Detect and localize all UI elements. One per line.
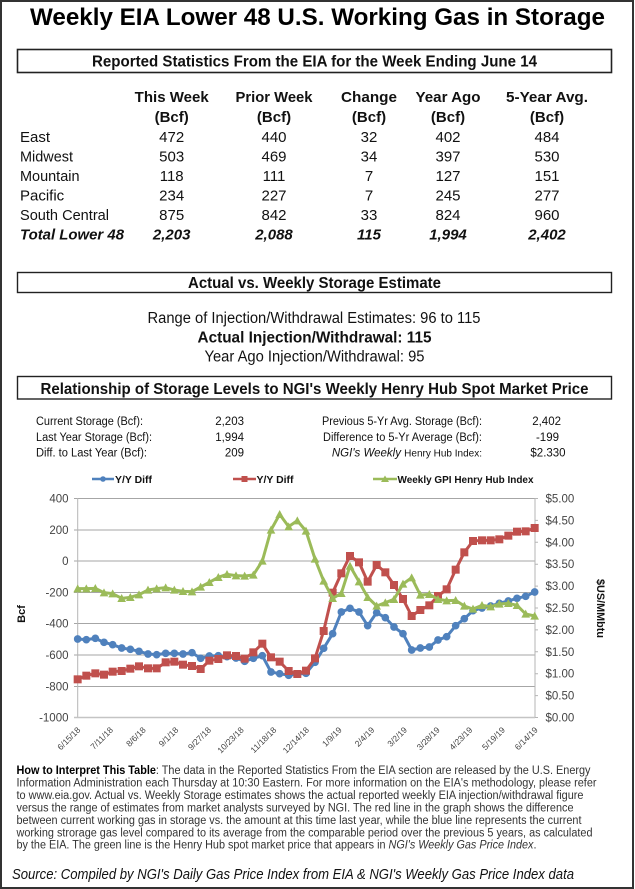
left axis labels [39,494,68,724]
x axis date labels: 3/2/19 [385,725,409,749]
panel: storage summary stats: 2,402 [532,416,561,428]
table row: East: 402 [435,129,461,146]
table column headers: Prior Week [236,89,313,106]
legend: blue series [92,474,152,486]
table row: Mountain: 111 [263,168,285,185]
table row: Total Lower 48: Total Lower 48 [20,226,125,244]
right axis labels: $0.50 [546,691,574,703]
table row: East: 484 [534,129,560,146]
table column headers: (Bcf) [352,109,386,126]
left axis labels: -200 [45,588,68,600]
x axis date labels: 11/18/18 [248,725,279,755]
table row: East: 472 [159,129,184,146]
legend: green series: Weekly GPI Henry Hub Index [398,474,534,486]
table row: Midwest [20,148,560,166]
series: red Y/Y diff [78,528,535,679]
chart legend [92,474,534,486]
table row: Mountain: 127 [435,168,461,185]
table row: East [20,129,560,146]
x axis date labels: 4/23/19 [447,725,475,752]
x axis date labels: 7/11/18 [88,725,115,752]
panel: storage statistics table [20,89,588,244]
table row: Pacific: 7 [365,188,373,204]
table row: Mountain: Mountain [20,168,80,185]
left axis labels: -800 [45,682,68,694]
left axis labels: -600 [45,650,68,662]
table row: Midwest: 397 [435,148,461,166]
right axis labels: $3.00 [546,581,574,593]
table row: South Central: 960 [534,207,560,224]
panel: storage summary stats: Previous 5-Yr Avg. Storage (Bcf): [322,416,482,428]
legend: red series [233,474,294,486]
x axis date labels: 6/15/18 [55,725,83,752]
table row: Midwest: Midwest [20,148,74,166]
right axis labels: $5.00 [546,494,574,506]
right axis labels: $0.00 [546,712,574,724]
table row: Midwest: 503 [159,148,184,166]
panel: storage summary stats [36,416,566,460]
table column headers: (Bcf) [155,109,189,126]
panel: reported statistics heading: Reported Statistics From the EIA for the Week Ending June 14 [92,54,537,70]
panel: relationship heading: Relationship of Storage Levels to NGI's Weekly Henry Hub Spot Market Price [40,381,589,398]
right axis labels: $3.50 [546,559,574,571]
table column headers [135,89,588,126]
panel: storage summary stats: -199 [536,432,559,444]
table row: East: 32 [361,129,377,146]
table row: Pacific: 277 [534,188,560,204]
table row: Total Lower 48 [20,226,566,244]
panel: storage summary stats: Difference to 5-Yr Average (Bcf): [323,432,482,444]
right axis title: $US/MMbtu [594,579,606,638]
x axis date labels: 12/14/18 [281,725,311,755]
text block: estimate summary: Range of Injection/Withdrawal Estimates: 96 to 115 [148,310,480,327]
table row: Mountain: 7 [365,168,373,185]
x axis date labels: 6/14/19 [513,725,540,752]
x axis date labels: 8/6/18 [124,725,148,749]
left axis labels: 0 [62,556,68,568]
table row: Total Lower 48: 115 [357,226,382,244]
left axis labels: -400 [45,618,68,630]
panel: storage summary stats: NGI's Weekly Henry Hub Index: [332,448,482,460]
title: Weekly EIA Lower 48 U.S. Working Gas in Storage [30,4,605,31]
table row: Pacific: Pacific [20,188,65,204]
table row: Pacific: 234 [159,188,184,204]
x axis date labels: 9/27/18 [186,725,213,752]
text block: how to interpret: versus the range of estimates from market analysts surveyed by NGI. The red line in the graph shows the difference [16,803,574,815]
table column headers: (Bcf) [257,109,291,126]
x axis date labels: 3/28/19 [415,725,442,752]
panel: storage summary stats: Current Storage (Bcf): [36,416,143,428]
left axis labels: 400 [49,494,68,506]
table column headers: 5-Year Avg. [506,89,588,106]
right axis labels: $2.50 [546,603,574,615]
text block: how to interpret: between current working gas in storage vs. the amount at this time last year, while the blue line represents the current [16,815,582,827]
panel: actual vs estimate heading [18,272,612,292]
panel: actual vs estimate heading: Actual vs. Weekly Storage Estimate [188,275,441,292]
panel: storage summary stats: $2.330 [530,448,566,460]
table column headers: (Bcf) [530,109,564,126]
x axis date labels [55,725,540,755]
text block: how to interpret: working strorage gas level compared to its average from the comparable period over the previous 5 years, as calculated [16,827,592,839]
panel: storage summary stats: Last Year Storage (Bcf): [36,432,152,444]
table row: South Central: South Central [20,207,109,224]
x axis date labels: 5/19/19 [480,725,507,752]
x axis date labels: 1/9/19 [320,725,344,749]
text block: how to interpret [16,765,597,852]
table row: South Central: 842 [261,207,287,224]
text block: estimate summary: Year Ago Injection/Withdrawal: 95 [204,348,424,366]
x axis date labels: 9/1/18 [157,725,181,749]
chart gridlines and axes [74,498,538,718]
text block: estimate summary [148,310,480,366]
table column headers: (Bcf) [431,109,465,126]
table row: Midwest: 530 [534,148,560,166]
table row: Midwest: 34 [361,148,377,166]
table row: East: 440 [261,129,287,146]
table row: Mountain [20,168,560,185]
table column headers: This Week [135,89,209,106]
table row: East: East [20,129,51,146]
right axis labels: $1.50 [546,647,574,659]
table row: South Central: 33 [361,207,377,224]
table row: Mountain: 118 [160,168,184,185]
right axis labels: $2.00 [546,625,574,637]
legend: red series: Y/Y Diff [256,474,294,486]
panel: storage summary stats: 209 [225,448,244,460]
table row: Midwest: 469 [261,148,287,166]
legend: blue series: Y/Y Diff [115,474,152,486]
table row: Total Lower 48: 2,088 [254,226,293,244]
table row: South Central [20,207,560,224]
text block: how to interpret: Information Administration each Thursday at 10:30 Eastern. For more information on the EIA's methodology, please refer [16,778,597,790]
table column headers: Change [341,89,397,106]
line chart [16,494,606,755]
table row: Pacific: 227 [261,188,287,204]
right axis labels: $1.00 [546,669,574,681]
text block: estimate summary: Actual Injection/Withdrawal: 115 [198,330,432,346]
left axis labels: 200 [49,525,68,537]
panel: reported statistics heading [18,50,612,72]
chart series lines [78,514,535,679]
table column headers: Year Ago [416,89,480,106]
right axis labels: $4.00 [546,537,574,549]
series: blue Y/Y diff [78,592,535,675]
right axis labels: $4.50 [546,515,574,527]
panel: storage summary stats: 2,203 [215,416,244,428]
table row: Mountain: 151 [534,168,560,185]
table row: South Central: 824 [435,207,461,224]
table row: South Central: 875 [159,207,184,224]
table row: Total Lower 48: 2,203 [152,226,191,244]
left axis labels: -1000 [39,712,68,724]
text block: how to interpret: to www.eia.gov. Actual vs. Weekly Storage estimates shows the actual reported weekly EIA injection/withdrawal figure [16,790,584,802]
text block: how to interpret: by the EIA. The green line is the Henry Hub spot market price that appears in NGI's Weekly Gas Price Index. [16,840,536,852]
x axis date labels: 10/23/18 [215,725,246,755]
x axis date labels: 2/4/19 [353,725,377,749]
text block: how to interpret: How to Interpret This Table: The data in the Reported Statistics From the EIA section are released by the U.S. Energy [16,765,591,777]
table row: Pacific: 245 [435,188,461,204]
right axis labels [546,494,574,724]
left axis title: Bcf [16,605,28,623]
series: green Henry Hub index [78,514,535,616]
panel: storage summary stats: Diff. to Last Year (Bcf): [36,448,147,460]
table row: Total Lower 48: 2,402 [527,226,566,244]
table row: Total Lower 48: 1,994 [429,226,467,244]
panel: storage summary stats: 1,994 [215,432,245,444]
table row: Pacific [20,188,560,204]
